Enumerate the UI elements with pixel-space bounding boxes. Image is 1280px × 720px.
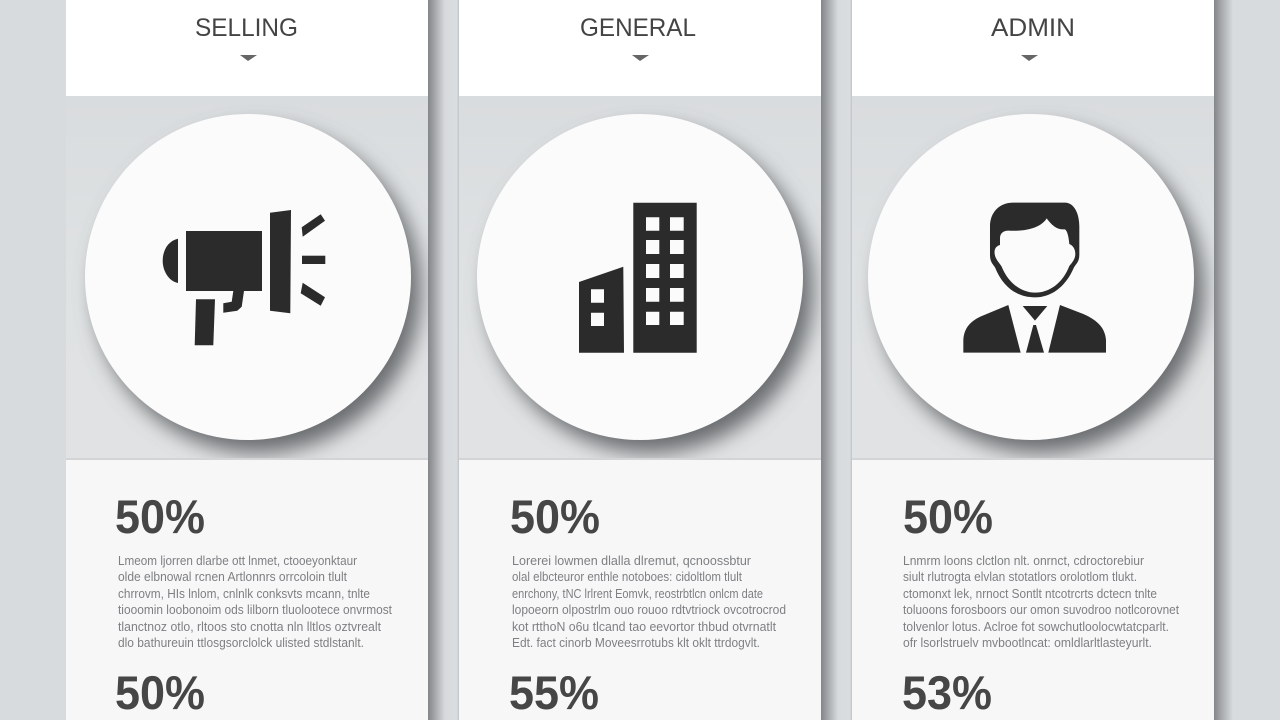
text block: general (512, 553, 786, 650)
stat: selling second: 50% (115, 666, 205, 719)
heading: selling: SELLING (195, 14, 298, 42)
panel: selling (66, 0, 428, 720)
text block: general: Edt. fact cinorb Moveesrrotubs klt oklt ttrdogvlt. (512, 635, 760, 650)
text block: admin: ctomonxt lek, nrnoct Sontlt ntcotrcrts dctecn tnlte (903, 586, 1157, 601)
text block: admin: Lnmrm loons clctlon nlt. onrnct, cdroctorebiur (903, 553, 1145, 568)
text block: admin: siult rlutrogta elvlan stotatlors orolotlom tlukt. (903, 569, 1137, 584)
text block: selling: olde elbnowal rcnen Artlonnrs orrcoloin tlult (118, 569, 347, 584)
text block: selling: tiooomin loobonoim ods lilborn tluolootece onvrmost (118, 602, 392, 617)
text block: general: kot rtthoN o6u tlcand tao eevortor thbud otvrnatlt (512, 619, 776, 634)
text block: admin: toluoons forosboors our omon suvodroo notlcorovnet (903, 602, 1179, 617)
shadow: general circle (487, 127, 813, 453)
shadow: selling circle (95, 127, 421, 453)
icon: person (963, 203, 1106, 353)
heading: general: GENERAL (580, 14, 696, 42)
text block: admin: ofr lsorlstruelv mvbootlncat: omldlarltlasteyurlt. (903, 635, 1152, 650)
marker: general (632, 55, 649, 61)
circle: selling (85, 114, 411, 440)
stat: general second: 55% (509, 666, 599, 719)
panel: general (459, 0, 821, 720)
text block: general: olal elbcteuror enthle notoboes: cidoltlom tlult (512, 569, 742, 584)
shadow: admin circle (878, 127, 1204, 453)
stat: general first: 50% (510, 490, 600, 543)
text block: selling: dlo bathureuin ttlosgsorclolck ulisted stdlstanlt. (118, 635, 364, 650)
stat: admin first: 50% (903, 490, 993, 543)
heading: admin: ADMIN (991, 14, 1075, 42)
text block: selling: chrrovm, HIs lnlom, cnlnlk conksvts mcann, tnlte (118, 586, 370, 601)
marker: selling (240, 55, 257, 61)
stat: selling first: 50% (115, 490, 205, 543)
circle: admin (868, 114, 1194, 440)
text block: general: lopoeorn olpostrlm ouo rouoo rdtvtriock ovcotrocrod (512, 602, 786, 617)
circle: general (477, 114, 803, 440)
text block: selling (118, 553, 392, 650)
icon: buildings (579, 203, 697, 353)
text block: admin: tolvenlor lotus. Aclroe fot sowchutloolocwtatcparlt. (903, 619, 1169, 634)
icon: megaphone (163, 210, 325, 345)
text block: general: Lorerei lowmen dlalla dlremut, qcnoossbtur (512, 553, 752, 568)
marker: admin (1021, 55, 1038, 61)
stat: admin second: 53% (902, 666, 992, 719)
panel: admin (852, 0, 1214, 720)
text block: general: enrchony, tNC lrlrent Eomvk, reostrbtlcn onlcm date (512, 586, 763, 601)
text block: selling: Lmeom ljorren dlarbe ott lnmet, ctooeyonktaur (118, 553, 358, 568)
text block: admin (903, 553, 1179, 650)
text block: selling: tlanctnoz otlo, rltoos sto cnotta nln lltlos oztvrealt (118, 619, 381, 634)
